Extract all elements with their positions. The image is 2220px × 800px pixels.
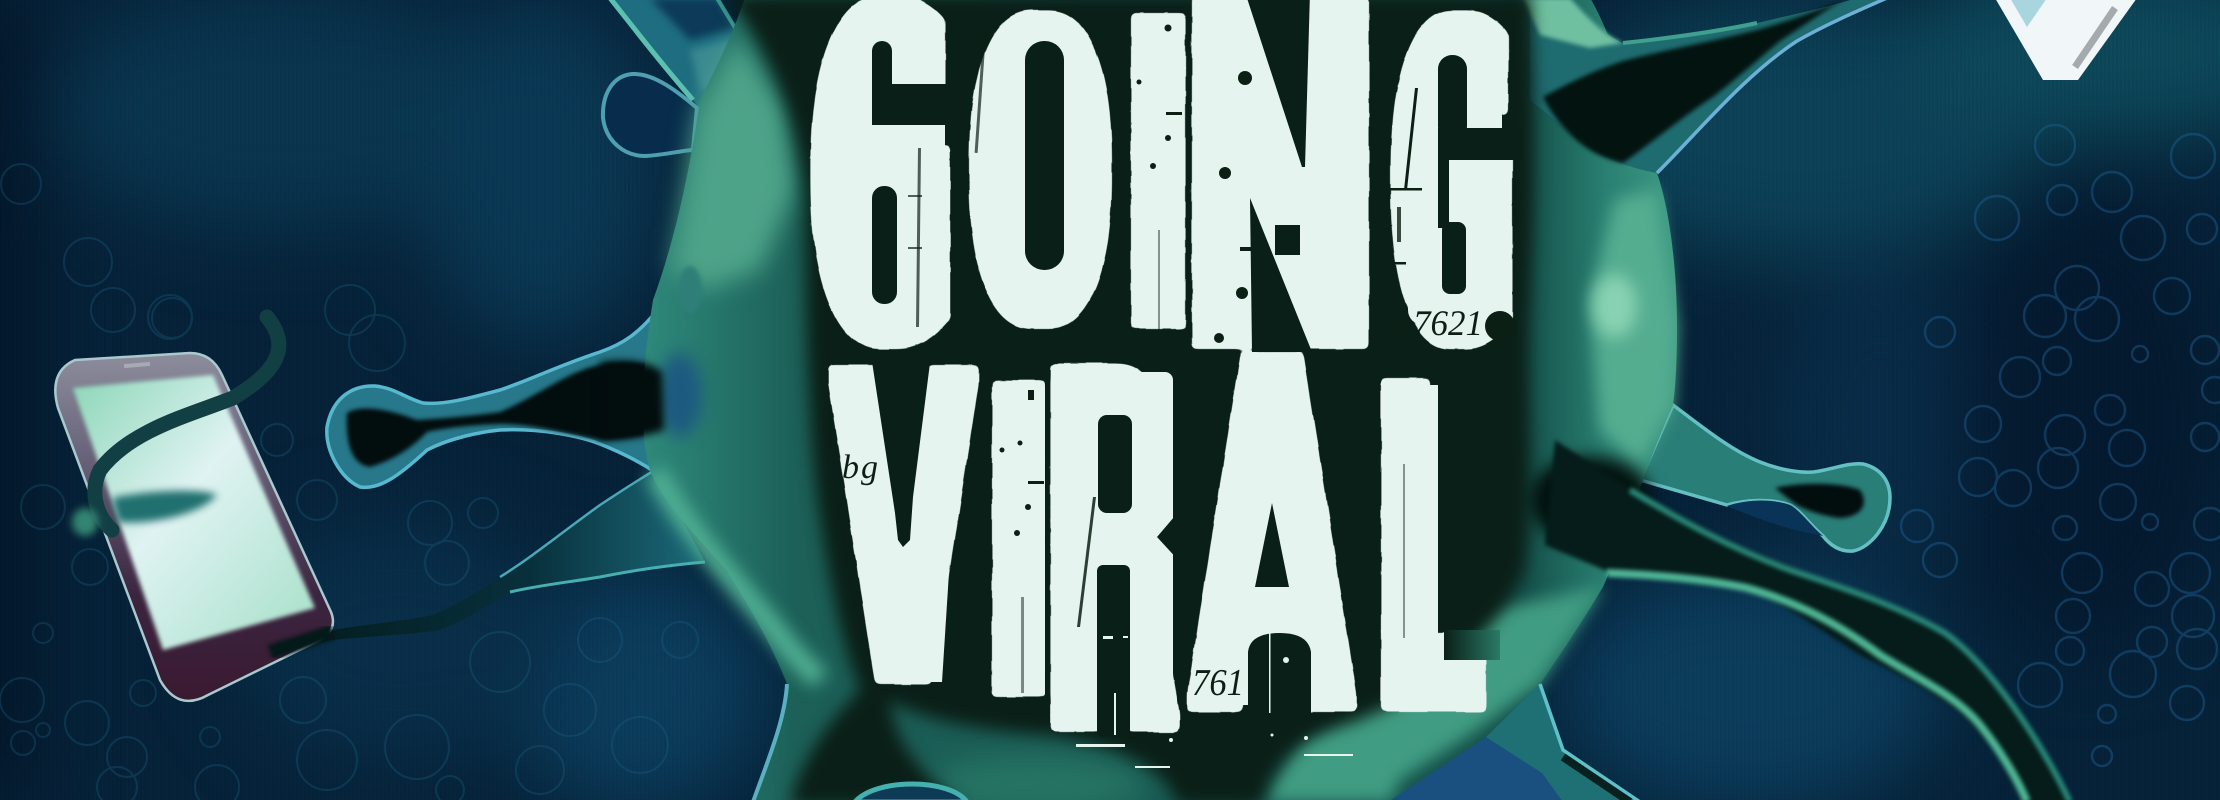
dark centre [725,0,1534,800]
title text [811,0,1514,800]
spike: loop [603,74,697,156]
spike: left with bulb [327,300,700,487]
phone: left [55,317,333,701]
background bubbles: right [1901,125,2220,766]
title [811,0,1523,800]
phone speaker [124,362,150,368]
body lower right highlight [1262,587,1603,800]
body bottom glow [930,755,1150,800]
title letter fill [845,0,1502,727]
spike: upper left [610,0,785,112]
phone screen shadow band [112,491,217,523]
tail over phone base [270,632,333,652]
body left lower band [655,472,820,680]
title scratched marks: 7621 [1413,303,1483,343]
word: VIRAL: I [984,307,1054,785]
body top right highlight [1523,0,1623,48]
L foot cut [1444,630,1500,660]
left spike dark base [600,360,664,440]
body blue patch [658,353,702,437]
background bubbles: left [0,164,698,800]
green glow [72,508,98,536]
spike: lower left thin tail [270,470,705,648]
phone: top right [1995,0,2137,80]
title distress marks [908,24,1515,693]
body shade blotches [678,266,702,314]
title letter counters [871,0,1523,737]
title text: L [1374,302,1482,800]
title scratched marks [842,303,1483,704]
spike: right with bulb [1640,405,1890,551]
bottom arc [855,784,967,800]
tail base shadow [1528,456,1652,544]
title scratched marks: bg [842,449,878,486]
spike: bottom right [1388,684,1640,800]
spike: long right tail [1545,440,2072,800]
tail wrapping phone [95,317,279,530]
body [600,0,1677,800]
body left highlight [672,36,795,290]
word: VIRAL: A [1195,268,1350,800]
spike: upper right [1523,0,1887,173]
title crumbs [1076,633,1353,768]
body right highlight [1590,190,1677,465]
phone side smudge [2075,8,2115,67]
phone screen corner [2010,0,2047,27]
spike: bottom left edge [753,684,787,800]
phone case [55,353,333,701]
title scratched marks: 761 [1192,662,1244,704]
word: VIRAL: V [836,293,972,773]
phone screen [73,375,315,650]
